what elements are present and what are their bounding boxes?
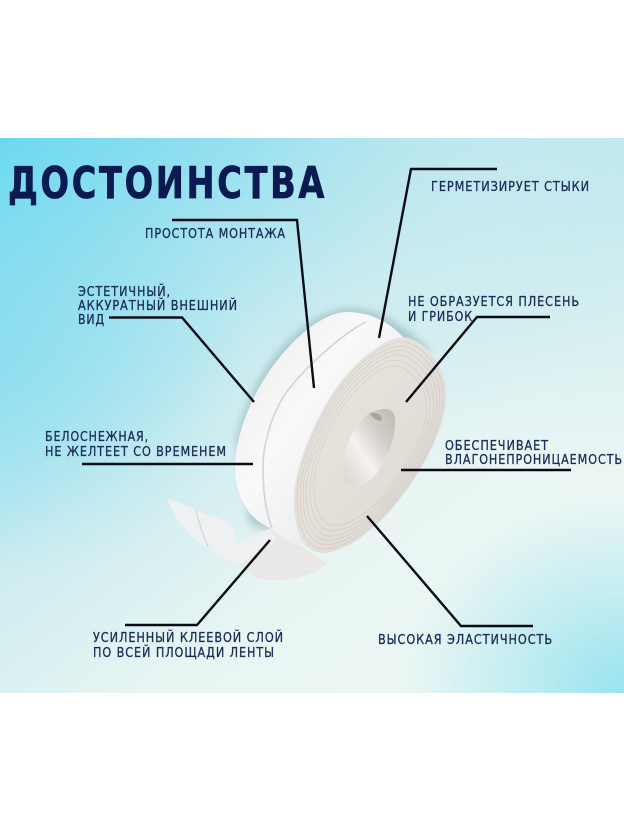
- callout: эстетичный вид: ВИД: [78, 312, 105, 328]
- loose tape end: [167, 498, 327, 580]
- callout: усиленный клеевой слой: УСИЛЕННЫЙ КЛЕЕВОЙ СЛОЙ: [93, 628, 284, 646]
- title: ДОСТОИНСТВА: [8, 158, 327, 209]
- callout: высокая эластичность: ВЫСОКАЯ ЭЛАСТИЧНОСТЬ: [378, 632, 553, 648]
- callout: эстетичный вид: [78, 282, 254, 402]
- background panel: [0, 138, 624, 693]
- callout: белоснежная: НЕ ЖЕЛТЕЕТ СО ВРЕМЕНЕМ: [45, 444, 227, 460]
- callout: простота монтажа: [145, 220, 314, 388]
- callout: влагонепроницаемость: [401, 438, 623, 470]
- callout: влагонепроницаемость: ОБЕСПЕЧИВАЕТ: [445, 438, 549, 454]
- winding rings: [297, 341, 443, 549]
- tape roll illustration: [167, 309, 446, 580]
- roll shadow: [236, 309, 430, 540]
- roll end face: [294, 337, 446, 553]
- callout: высокая эластичность: [367, 516, 553, 648]
- callout: плесень: [406, 294, 580, 402]
- tape fold line: [263, 322, 366, 528]
- callout: герметизирует стыки: ГЕРМЕТИЗИРУЕТ СТЫКИ: [431, 179, 590, 195]
- callout: эстетичный вид: АККУРАТНЫЙ ВНЕШНИЙ: [78, 296, 238, 314]
- callout: усиленный клеевой слой: [93, 540, 284, 661]
- callout: белоснежная: БЕЛОСНЕЖНАЯ,: [45, 429, 149, 445]
- roll outer surface: [235, 312, 403, 553]
- roll back layer: [240, 528, 327, 580]
- callout: эстетичный вид: ЭСТЕТИЧНЫЙ,: [78, 282, 171, 300]
- callout: плесень: И ГРИБОК: [408, 309, 473, 325]
- callout: белоснежная: [45, 429, 253, 464]
- callout: простота монтажа: ПРОСТОТА МОНТАЖА: [145, 226, 286, 242]
- center hole: [343, 409, 395, 487]
- callout: плесень: НЕ ОБРАЗУЕТСЯ ПЛЕСЕНЬ: [408, 294, 580, 310]
- callout: герметизирует стыки: [379, 169, 590, 338]
- callout: усиленный клеевой слой: ПО ВСЕЙ ПЛОЩАДИ ЛЕНТЫ: [93, 643, 275, 661]
